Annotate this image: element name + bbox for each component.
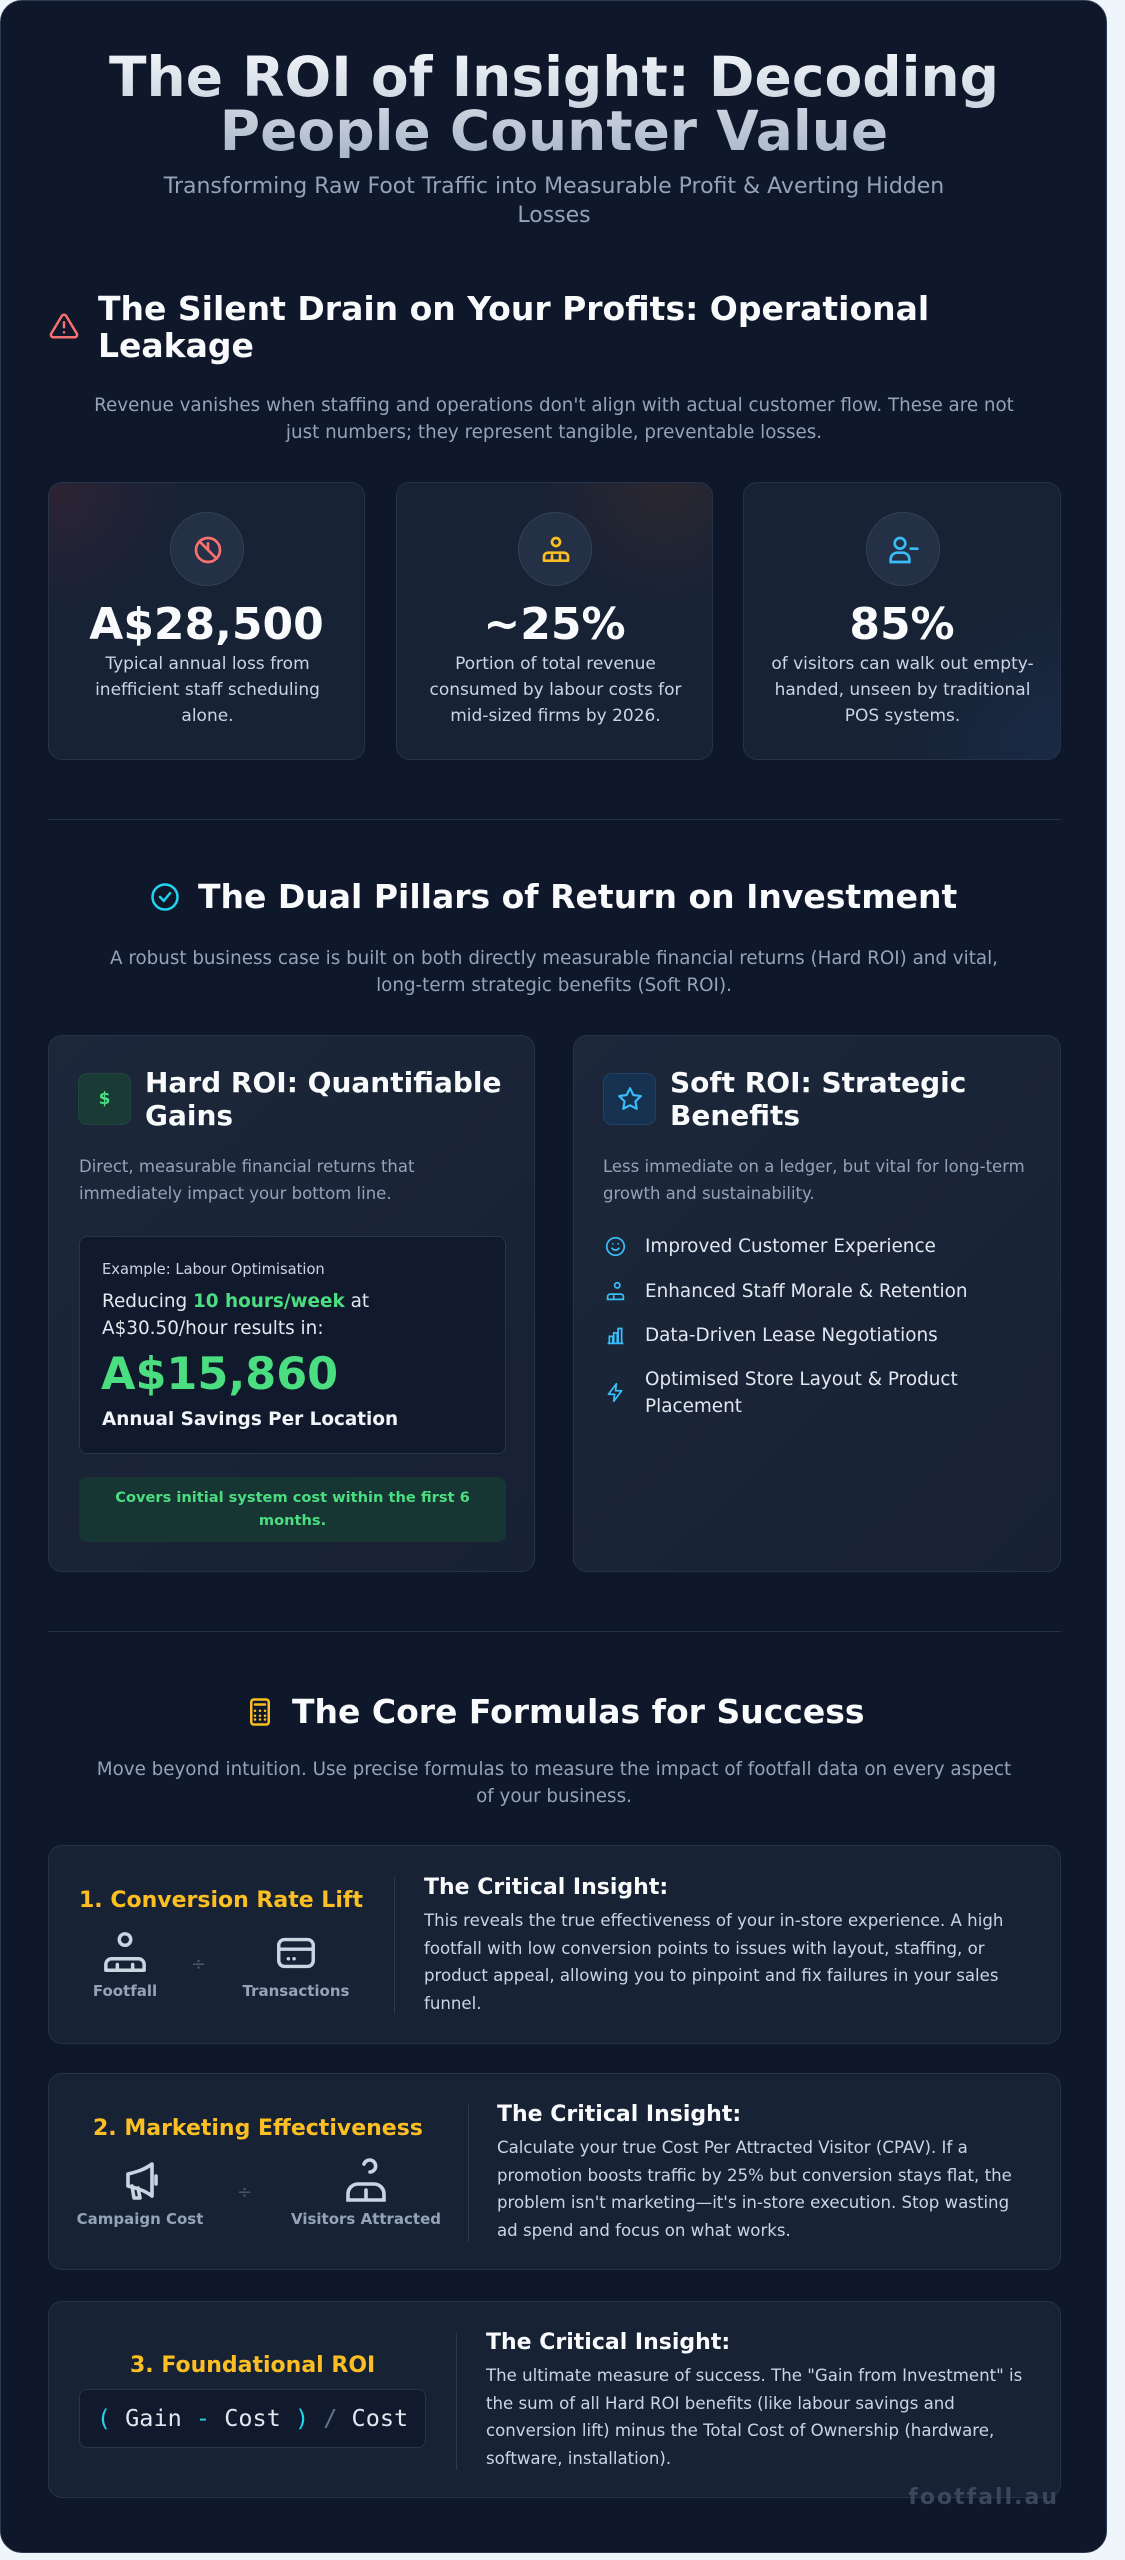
subtitle xyxy=(164,174,944,228)
panel: hard ROI xyxy=(48,1035,535,1572)
section description xyxy=(94,395,1014,443)
panel: formula 3 ROI xyxy=(48,2301,1061,2498)
section description: A robust business case is built on both directly measurable financial returns (Hard ROI) and vital, xyxy=(110,948,998,969)
heading text: The Core Formulas for Success xyxy=(292,1692,864,1731)
item: layout: Placement xyxy=(645,1396,742,1417)
icon: dollar xyxy=(78,1073,131,1125)
divide sign: ÷ xyxy=(191,1954,206,1975)
insight text: The ultimate measure of success. The "Gain from Investment" is the sum of all Hard ROI benefits (like labour savings and conversion lift) minus the Total Cost of Ownership (hardware, software, installation). xyxy=(486,2366,1022,2468)
description xyxy=(603,1157,1025,1203)
formula box xyxy=(79,2389,426,2448)
icon: transactions xyxy=(242,1938,349,2000)
description: Less immediate on a ledger, but vital for long-term xyxy=(603,1157,1025,1176)
icon: no clock xyxy=(170,512,244,586)
item: layout xyxy=(608,1369,958,1417)
panel: formula 2 marketing xyxy=(48,2073,1061,2270)
number: ~25% xyxy=(483,599,626,650)
panel: stat A$28,500 xyxy=(48,482,365,760)
item: layout: Optimised Store Layout & Product xyxy=(645,1369,958,1390)
title xyxy=(1,50,1107,158)
icon: megaphone: Campaign Cost xyxy=(77,2210,203,2228)
section description: Move beyond intuition. Use precise formulas to measure the impact of footfall data on every aspect xyxy=(97,1759,1011,1780)
icon: footfall: Footfall xyxy=(93,1982,157,2000)
item: staff morale: Enhanced Staff Morale & Retention xyxy=(645,1281,968,1302)
heading: Benefits xyxy=(670,1099,800,1132)
callout: payback xyxy=(79,1477,506,1542)
icon: megaphone xyxy=(77,2162,204,2228)
icon: transactions: Transactions xyxy=(243,1982,349,2000)
insight text: The Critical Insight: xyxy=(486,2330,730,2355)
heading text: The Dual Pillars of Return on Investment xyxy=(198,877,957,916)
example text xyxy=(102,1291,369,1339)
panel: formula 1 conversion xyxy=(48,1845,1061,2044)
heading text: Leakage xyxy=(98,326,254,365)
section description: just numbers; they represent tangible, preventable losses. xyxy=(286,422,822,443)
formula title: 2. Marketing Effectiveness xyxy=(93,2116,423,2141)
section description: of your business. xyxy=(476,1786,632,1807)
subtitle: Losses xyxy=(517,203,591,228)
example box xyxy=(79,1236,506,1454)
heading text xyxy=(98,289,929,365)
item: customer experience: Improved Customer Experience xyxy=(645,1236,936,1257)
section description xyxy=(110,948,998,996)
description: immediately impact your bottom line. xyxy=(79,1184,392,1203)
heading text: The Silent Drain on Your Profits: Operational xyxy=(98,289,929,328)
icon: staff xyxy=(518,512,592,586)
insight text: The Critical Insight: xyxy=(424,1875,668,1900)
icon: footfall xyxy=(93,1932,157,2000)
text: Portion of total revenue consumed by labour costs for mid-sized firms by 2026. xyxy=(429,654,682,726)
savings label: Annual Savings Per Location xyxy=(102,1409,398,1430)
section heading: dual pillars xyxy=(151,877,957,916)
text: Typical annual loss from inefficient staff scheduling alone. xyxy=(95,654,320,726)
description: Direct, measurable financial returns that xyxy=(79,1157,414,1176)
formula title: 1. Conversion Rate Lift xyxy=(79,1888,363,1913)
insight text: This reveals the true effectiveness of your in-store experience. A high footfall with low conversion points to issues with layout, staffing, or product appeal, allowing you to pinpoint and fix failures in your sales funnel. xyxy=(424,1911,1003,2012)
subtitle: Transforming Raw Foot Traffic into Measurable Profit & Averting Hidden xyxy=(164,174,944,199)
title: The ROI of Insight: Decoding xyxy=(109,45,999,109)
description xyxy=(79,1157,414,1203)
panel: stat 25% xyxy=(396,482,713,760)
icon: visitors xyxy=(291,2158,441,2228)
heading: Hard ROI: Quantifiable xyxy=(145,1066,501,1099)
example text: Reducing 10 hours/week at xyxy=(102,1291,369,1312)
callout: payback: months. xyxy=(259,1512,326,1529)
insight text: The Critical Insight: xyxy=(497,2102,741,2127)
number: 85% xyxy=(849,599,955,650)
heading xyxy=(145,1066,501,1132)
savings number: A$15,860 xyxy=(101,1349,338,1400)
section description: Revenue vanishes when staffing and operations don't align with actual customer flow. These are not xyxy=(94,395,1014,416)
heading: Soft ROI: Strategic xyxy=(670,1066,966,1099)
panel: stat 85% xyxy=(743,482,1061,760)
heading xyxy=(670,1066,966,1132)
heading: Gains xyxy=(145,1099,233,1132)
section heading: operational leakage xyxy=(50,289,929,365)
item: lease: Data-Driven Lease Negotiations xyxy=(645,1325,938,1346)
title: People Counter Value xyxy=(220,99,888,163)
icon: calculator xyxy=(250,1698,270,1726)
icon: star xyxy=(603,1073,656,1125)
section description xyxy=(97,1759,1011,1807)
icon: dollar: $ xyxy=(99,1089,110,1109)
icon: check circle xyxy=(151,883,179,911)
callout: payback: Covers initial system cost within the first 6 xyxy=(115,1489,470,1506)
formula title: 3. Foundational ROI xyxy=(130,2353,375,2378)
icon: user minus xyxy=(866,512,940,586)
icon: warning xyxy=(50,314,78,338)
icon: visitors: Visitors Attracted xyxy=(291,2210,441,2228)
section description: long-term strategic benefits (Soft ROI). xyxy=(376,975,732,996)
panel: soft ROI xyxy=(573,1035,1061,1572)
number: A$28,500 xyxy=(89,599,324,650)
text: of visitors can walk out empty-handed, unseen by traditional POS systems. xyxy=(771,654,1034,726)
insight text: Calculate your true Cost Per Attracted Visitor (CPAV). If a promotion boosts traffic by 25% but conversion stays flat, the problem isn't marketing—it's in-store execution. Stop wasting ad spend and focus on what works. xyxy=(497,2138,1012,2240)
section heading: core formulas xyxy=(250,1692,864,1731)
divide sign: ÷ xyxy=(237,2182,252,2203)
example label: Example: Labour Optimisation xyxy=(102,1261,325,1278)
formula box: ( Gain - Cost ) / Cost xyxy=(97,2404,408,2432)
description: growth and sustainability. xyxy=(603,1184,815,1203)
watermark: footfall.au xyxy=(908,2485,1059,2510)
benefits list xyxy=(606,1236,968,1417)
example text: A$30.50/hour results in: xyxy=(102,1318,324,1339)
